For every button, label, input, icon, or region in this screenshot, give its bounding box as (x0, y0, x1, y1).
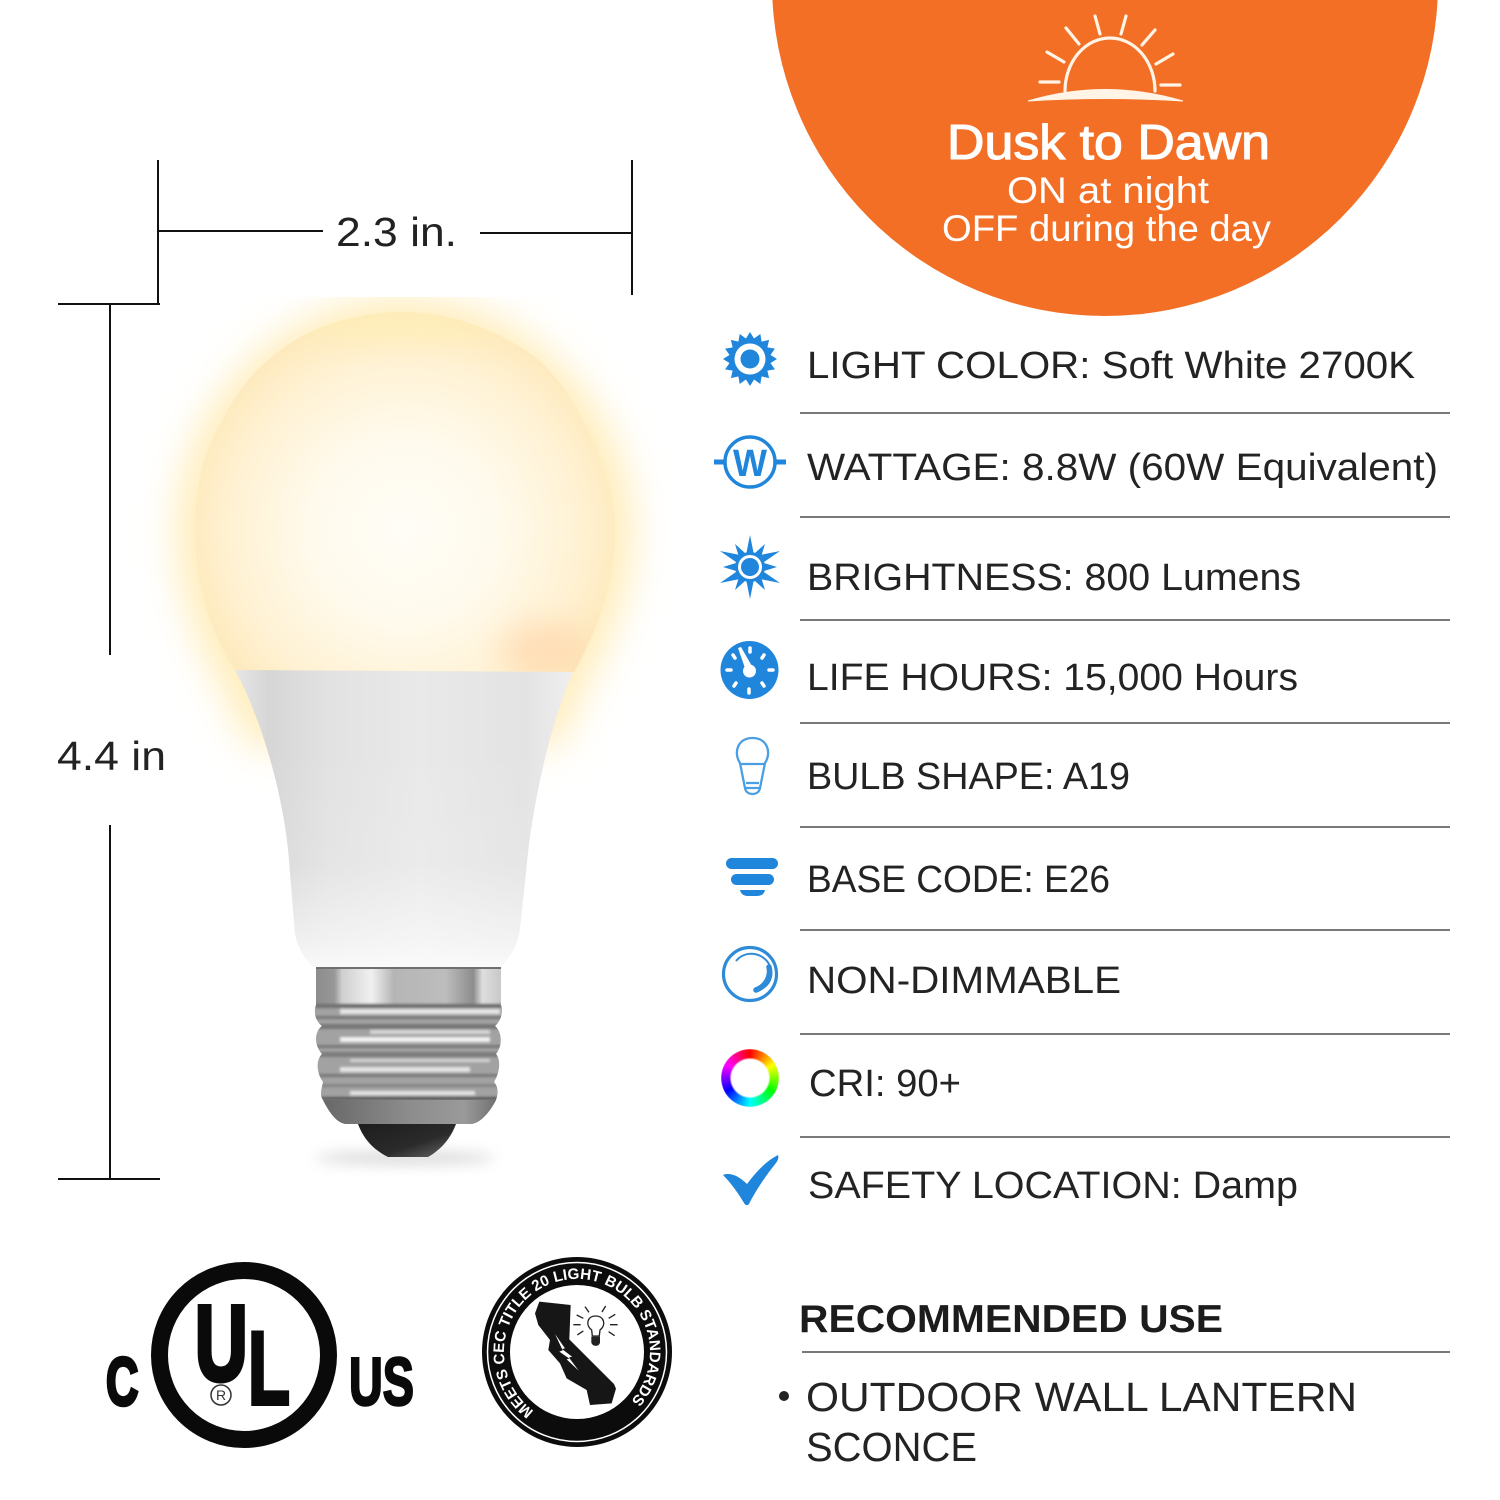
icon: watt meter: W (733, 443, 767, 485)
white neck (235, 670, 573, 967)
ground shadow (315, 1152, 495, 1164)
spec row: non-dimmable: NON-DIMMABLE (807, 960, 1121, 1002)
icon: watt meter (714, 437, 786, 487)
spec row: base code: BASE CODE: E26 (807, 859, 1110, 901)
seal ring (482, 1257, 672, 1447)
recommended use (779, 1298, 1450, 1470)
height dimension: 4.4 in (57, 304, 166, 1179)
width dimension: 2.3 in. (158, 160, 632, 304)
letter L: L (248, 1310, 290, 1426)
bulb glow (178, 298, 632, 745)
UL ring (160, 1270, 328, 1440)
product photo: LED bulb (178, 298, 632, 1164)
letters US: US (349, 1344, 414, 1420)
icon: screw base (726, 858, 778, 896)
badge subtext (942, 170, 1272, 249)
letter U: U (195, 1284, 248, 1403)
heading: RECOMMENDED USE (799, 1298, 1223, 1341)
registered mark: R (216, 1387, 226, 1403)
spec row: light color (723, 332, 1415, 387)
spec row: life hours (720, 641, 1298, 699)
registered mark (211, 1385, 231, 1405)
spec row: safety location: SAFETY LOCATION: Damp (808, 1165, 1298, 1207)
spec row: wattage: WATTAGE: 8.8W (60W Equivalent) (807, 447, 1438, 489)
icon: rising sun (1028, 16, 1183, 101)
spec row: non-dimmable (724, 948, 1121, 1002)
spec row: bulb shape: BULB SHAPE: A19 (807, 756, 1130, 798)
frosted globe (204, 312, 605, 672)
certification: CEC Title 20 seal (482, 1257, 672, 1447)
spec row: safety location (723, 1155, 1298, 1207)
icon: clock dial (720, 641, 778, 699)
seal bulb icon (573, 1306, 618, 1345)
icon: bright sun (720, 535, 780, 599)
badge subtext: ON at night (1007, 170, 1210, 211)
badge circle (772, 0, 1438, 316)
width dimension: 2.3 in.: 2.3 in. (336, 209, 457, 255)
metal screw base (310, 960, 510, 1157)
badge subtext: OFF during the day (942, 208, 1272, 249)
icon: dimmer ring (724, 948, 776, 1000)
badge heading: Dusk to Dawn (947, 116, 1270, 170)
height dimension: 4.4 in: 4.4 in (57, 733, 166, 779)
orange badge: dusk to dawn (772, 0, 1438, 316)
icon: sun gear (723, 332, 777, 386)
certification: cULus mark (106, 1270, 414, 1440)
spec row: life hours: LIFE HOURS: 15,000 Hours (807, 657, 1298, 699)
use list (806, 1374, 1357, 1470)
use list: OUTDOOR WALL LANTERN (806, 1374, 1357, 1420)
letter c: C (106, 1345, 138, 1420)
spec row: wattage (714, 437, 1438, 489)
icon: check mark (723, 1155, 778, 1205)
spec row: light color: LIGHT COLOR: Soft White 2700K (807, 345, 1415, 387)
spec row: bulb shape (737, 738, 1130, 798)
icon: CRI colour wheel (721, 1049, 779, 1107)
seal lettering: MEETS CEC TITLE 20 LIGHT BULB STANDARDS (493, 1268, 660, 1418)
use list: SCONCE (806, 1424, 977, 1470)
bullet (779, 1391, 789, 1401)
icon: small bulb (737, 738, 768, 794)
California map (535, 1302, 616, 1405)
spec row: CRI: CRI: 90+ (809, 1063, 961, 1105)
spec row: brightness (720, 535, 1301, 599)
spec row: brightness: BRIGHTNESS: 800 Lumens (807, 557, 1301, 599)
